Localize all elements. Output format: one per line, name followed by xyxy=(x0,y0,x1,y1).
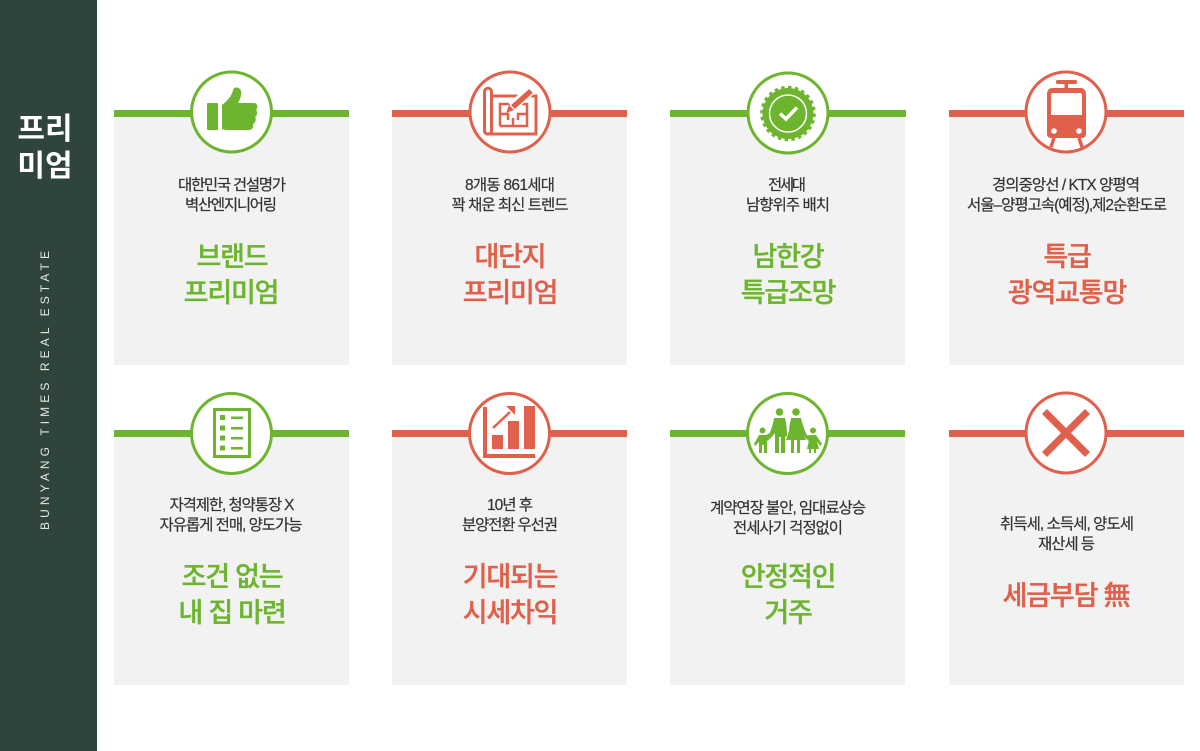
text: appreciation description: 10년 후 xyxy=(487,496,533,514)
text: vertical brand label: BUNYANG TIMES REAL ESTATE xyxy=(38,251,52,530)
text: residence description: 계약연장 불안, 임대료상승 xyxy=(710,499,866,517)
text: qualification description: 자격제한, 청약통장 X xyxy=(170,496,295,514)
panel: Han River view xyxy=(670,73,906,365)
text: appreciation description xyxy=(462,496,558,534)
heading: stable residence: 안정적인 xyxy=(741,562,835,592)
text: qualification description xyxy=(160,496,302,534)
heading: expected appreciation xyxy=(463,562,558,628)
heading: expected appreciation: 시세차익 xyxy=(463,598,557,628)
heading: Han River view: 특급조망 xyxy=(741,278,836,308)
heading: unconditional home: 조건 없는 xyxy=(182,562,283,592)
heading: brand premium: 브랜드 xyxy=(197,242,268,272)
heading: sidebar title xyxy=(17,113,73,183)
heading: transit network: 특급 xyxy=(1043,242,1091,272)
heading: expected appreciation: 기대되는 xyxy=(463,562,558,592)
text: residence description: 전세사기 걱정없이 xyxy=(733,519,843,537)
icon: cross xyxy=(1044,412,1088,454)
icon: certified badge xyxy=(762,88,814,140)
heading: large complex premium: 프리미엄 xyxy=(463,278,557,308)
icon: rising bar chart xyxy=(483,406,535,458)
icon: checklist xyxy=(214,410,250,456)
panel: sidebar xyxy=(0,0,97,751)
panel: unconditional home xyxy=(114,394,349,685)
heading: brand premium xyxy=(184,242,278,308)
text: tax description: 취득세, 소득세, 양도세 xyxy=(1000,515,1134,533)
heading: sidebar title: 프리 xyxy=(17,113,73,146)
text: qualification description: 자유롭게 전매, 양도가능 xyxy=(160,516,302,534)
heading: stable residence: 거주 xyxy=(764,598,812,628)
heading: unconditional home: 내 집 마련 xyxy=(178,598,286,628)
icon: family xyxy=(754,408,822,453)
text: transit description: 서울–양평고속(예정),제2순환도로 xyxy=(967,196,1167,214)
heading: unconditional home xyxy=(178,562,286,628)
text: view description xyxy=(746,176,830,214)
panel: no tax burden xyxy=(949,393,1184,685)
panel: brand premium xyxy=(114,72,349,365)
heading: transit network xyxy=(1008,242,1126,308)
heading: no tax burden: 세금부담 無 xyxy=(1003,581,1131,611)
heading: stable residence xyxy=(741,562,835,628)
text: large complex description xyxy=(452,176,568,214)
text: tax description xyxy=(1000,515,1134,553)
heading: Han River view: 남한강 xyxy=(753,242,824,272)
heading: transit network: 광역교통망 xyxy=(1008,278,1126,308)
heading: brand premium: 프리미엄 xyxy=(184,278,278,308)
text: transit description xyxy=(967,176,1167,214)
icon: thumbs up xyxy=(207,87,257,130)
text: view description: 남향위주 배치 xyxy=(746,196,830,214)
heading: Han River view xyxy=(741,242,836,308)
text: view description: 전세대 xyxy=(768,176,806,194)
heading: large complex premium xyxy=(463,242,557,308)
icon: blueprint and pencil xyxy=(484,88,536,134)
text: residence description xyxy=(710,499,866,537)
heading: large complex premium: 대단지 xyxy=(475,242,545,272)
panel: large complex premium xyxy=(392,72,627,365)
text: large complex description: 꽉 채운 최신 트렌드 xyxy=(452,196,568,214)
panel: expected appreciation xyxy=(392,394,627,685)
text: tax description: 재산세 등 xyxy=(1038,535,1095,553)
panel: stable residence xyxy=(670,394,905,685)
text: brand description xyxy=(178,176,286,214)
text: appreciation description: 분양전환 우선권 xyxy=(462,516,558,534)
text: large complex description: 8개동 861세대 xyxy=(465,176,555,194)
text: transit description: 경의중앙선 / KTX 양평역 xyxy=(992,176,1140,194)
panel: transit network xyxy=(949,72,1184,365)
heading: sidebar title: 미엄 xyxy=(17,150,73,183)
text: brand description: 벽산엔지니어링 xyxy=(185,196,277,214)
text: brand description: 대한민국 건설명가 xyxy=(178,176,286,194)
icon: train xyxy=(1047,80,1086,147)
